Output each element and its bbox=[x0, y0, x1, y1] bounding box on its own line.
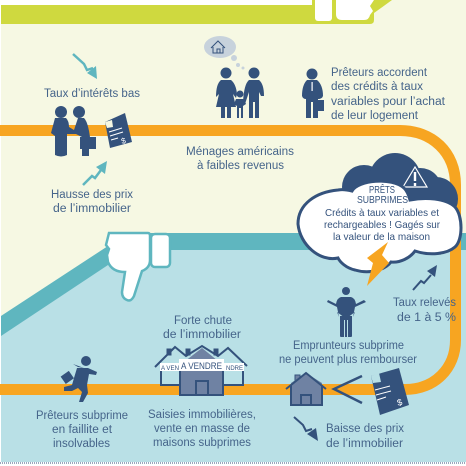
arrow: low rates down bbox=[73, 54, 97, 79]
panel: subprime cloud: SUBPRIMES bbox=[357, 194, 408, 206]
text: borrowers can't repay: ne peuvent plus rembourser bbox=[279, 354, 417, 366]
teal band with thumbs down bbox=[1, 233, 466, 336]
arrow: prices up bbox=[83, 161, 107, 185]
text: lenders grant variable loans: Prêteurs accordent bbox=[331, 67, 428, 79]
panel: subprime cloud bbox=[298, 153, 461, 272]
text: low income households bbox=[186, 146, 294, 172]
text: borrowers can't repay bbox=[279, 340, 417, 366]
icon: family bbox=[216, 68, 264, 118]
icon: contract document: $ bbox=[396, 397, 403, 408]
text: lenders bankrupt: Prêteurs subprime bbox=[36, 410, 128, 422]
text: taux d'intérêts bas: Taux d’intérêts bas bbox=[44, 88, 140, 100]
text: low income households: à faibles revenus bbox=[197, 160, 284, 172]
icon: lightning bolt bbox=[367, 242, 389, 286]
text: foreclosures: vente en masse de bbox=[154, 423, 250, 435]
text: lenders bankrupt bbox=[36, 410, 128, 450]
text: hausse des prix bbox=[51, 189, 133, 215]
icon: contract document bbox=[105, 113, 132, 148]
text: lenders grant variable loans: des crédits à taux bbox=[331, 81, 423, 93]
arrow: rates up bbox=[413, 265, 437, 290]
panel: subprime cloud: Crédits à taux variables et bbox=[325, 207, 439, 219]
text: lenders grant variable loans: variables pour l’achat bbox=[331, 96, 446, 108]
text: borrowers can't repay: Emprunteurs subprime bbox=[293, 340, 404, 352]
text: low income households: Ménages américains bbox=[186, 146, 294, 158]
icon: shrugging borrower bbox=[327, 287, 366, 337]
panel: subprime cloud: PRÊTS bbox=[369, 183, 395, 196]
icon: house bbox=[286, 373, 326, 405]
icon: contract document: $ bbox=[120, 136, 127, 146]
icon: houses for sale: A VEN bbox=[161, 366, 179, 372]
icon: running lender bbox=[61, 356, 97, 402]
icon: houses for sale: NDRE bbox=[226, 366, 243, 372]
panel: subprime cloud: rechargeables ! Gagés sur bbox=[324, 219, 440, 231]
icon: handshake bbox=[51, 106, 96, 156]
icon: warning triangle bbox=[403, 167, 427, 187]
icon: lender bbox=[302, 68, 324, 118]
orange timeline bbox=[0, 130, 456, 390]
arrow: prices down bbox=[294, 417, 318, 441]
text: hausse des prix: de l’immobilier bbox=[53, 203, 131, 215]
icon: houses for sale bbox=[155, 346, 247, 395]
panel: subprime cloud: la valeur de la maison bbox=[333, 231, 430, 243]
text: rates raised bbox=[393, 297, 456, 324]
icon: contract document bbox=[371, 368, 409, 415]
text: lenders bankrupt: insolvables bbox=[53, 438, 110, 450]
text: falling prices: de l’immobilier bbox=[326, 438, 403, 450]
text: lenders grant variable loans bbox=[331, 67, 446, 122]
icon: houses for sale: A VENDRE bbox=[181, 361, 222, 372]
top green band with thumbs up bbox=[1, 0, 392, 24]
text: lenders bankrupt: en faillite et bbox=[52, 424, 113, 436]
text: hausse des prix: Hausse des prix bbox=[51, 189, 133, 201]
text: falling prices: Baisse des prix bbox=[326, 423, 404, 435]
text: lenders grant variable loans: de leur logement bbox=[331, 110, 419, 122]
text: sharp fall bbox=[163, 315, 241, 341]
icon: thought bubble house bbox=[204, 36, 244, 70]
text: foreclosures: maisons subprimes bbox=[153, 437, 251, 449]
text: rates raised: Taux relevés bbox=[393, 297, 456, 309]
text: rates raised: de 1 à 5 % bbox=[397, 312, 456, 324]
arrow: chevron left bbox=[334, 376, 362, 403]
text: sharp fall: de l’immobilier bbox=[163, 329, 241, 341]
text: foreclosures: Saisies immobilières, bbox=[148, 409, 256, 421]
text: sharp fall: Forte chute bbox=[174, 315, 232, 327]
text: falling prices bbox=[326, 423, 404, 450]
text: foreclosures bbox=[148, 409, 256, 449]
